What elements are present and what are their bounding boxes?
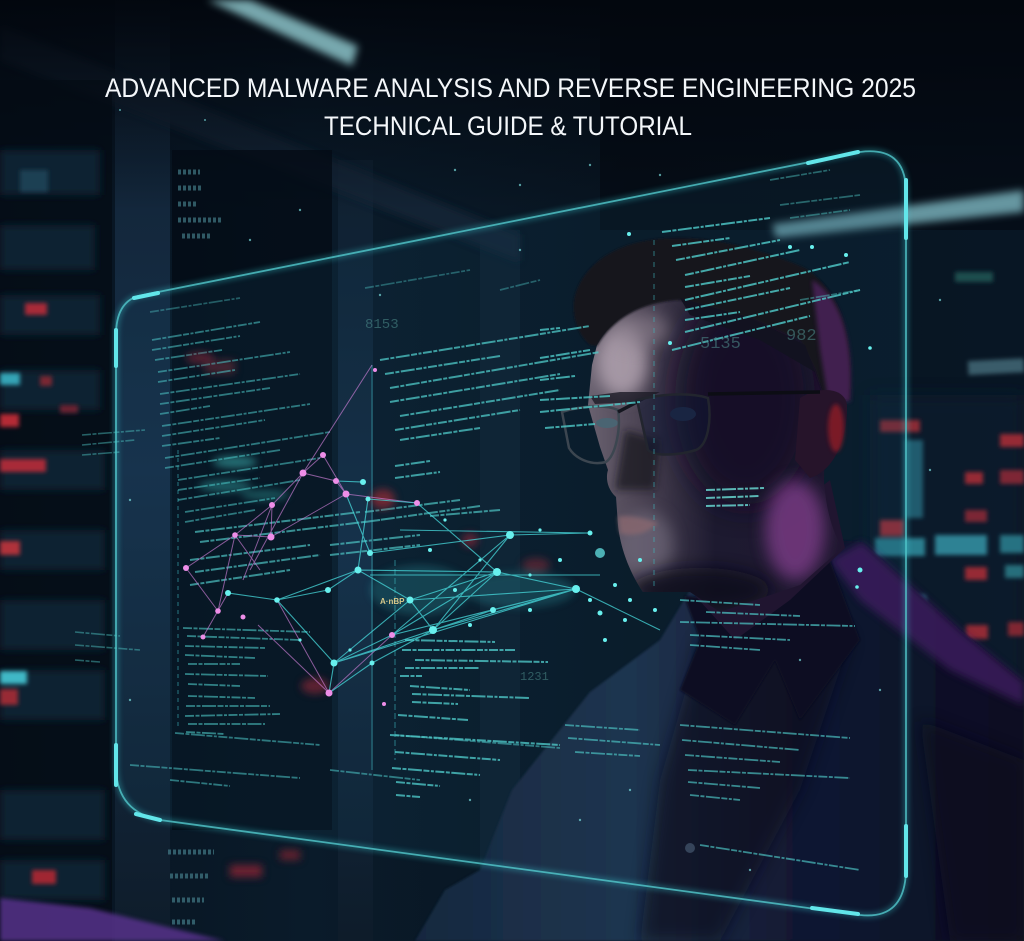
brow-side light xyxy=(610,312,670,348)
shirt collar xyxy=(680,560,860,725)
hair fill behind code xyxy=(680,298,815,372)
code block: upper left xyxy=(152,322,330,522)
title line 2: TECHNICAL GUIDE & TUTORIAL xyxy=(324,111,692,141)
vertical panel guides xyxy=(178,240,654,770)
face xyxy=(588,299,833,612)
network graph xyxy=(183,232,872,706)
ear xyxy=(795,390,847,478)
faded digits: 1231 xyxy=(520,670,549,684)
floor purple strip xyxy=(0,898,225,941)
server rack: right xyxy=(870,272,1024,795)
faded digits: 8153 xyxy=(365,317,399,333)
code block: mid over graph xyxy=(190,500,500,585)
graph edges: cyan xyxy=(228,481,660,693)
lips xyxy=(618,516,658,535)
code block: centre xyxy=(380,326,600,478)
faded digits: 982 xyxy=(786,327,817,346)
ear red glow xyxy=(828,404,844,452)
code block: lower centre xyxy=(390,640,560,797)
graph edges: pink xyxy=(186,365,417,693)
shirt button xyxy=(685,843,695,853)
hair xyxy=(574,238,851,402)
scattered particles xyxy=(119,109,941,871)
brow xyxy=(590,392,660,404)
glass panel tint xyxy=(116,151,906,915)
title line 1: ADVANCED MALWARE ANALYSIS AND REVERSE ENGINEERING 2025 xyxy=(105,73,916,103)
code block: top panel faint xyxy=(150,270,540,312)
graph amber label: A·nBP xyxy=(380,597,405,606)
cheek purple glow xyxy=(765,480,825,580)
shirt xyxy=(415,540,1024,941)
code block: left of glasses xyxy=(540,328,640,428)
nose shadow xyxy=(615,430,660,490)
glowing panel frame xyxy=(116,151,906,915)
code block: bottom caption xyxy=(130,733,560,786)
faded digits: 5135 xyxy=(700,335,741,354)
chin shadow xyxy=(630,568,770,612)
hair purple side xyxy=(812,280,851,402)
forehead highlight xyxy=(596,326,648,398)
code block: outside left xyxy=(75,430,145,662)
ceiling light streak xyxy=(207,0,358,66)
graph nodes: cyan xyxy=(225,232,872,666)
title xyxy=(105,73,916,141)
blurred data glows xyxy=(186,352,575,694)
shirt dark folds xyxy=(640,590,1024,941)
code block: lower left xyxy=(183,628,310,734)
code block: shirt lower xyxy=(565,725,860,870)
server rack: left xyxy=(0,150,105,900)
code text blocks on panel xyxy=(75,170,860,870)
code block: shirt top xyxy=(680,600,855,650)
code block: top right corner xyxy=(770,170,860,300)
eyes xyxy=(596,407,696,428)
server rack: centre-left with digits xyxy=(168,172,300,922)
person xyxy=(415,238,1024,941)
wall light streak xyxy=(772,190,1024,238)
shirt shoulder highlight xyxy=(830,542,1024,705)
code block: on cheek xyxy=(706,488,765,506)
lower face light xyxy=(617,511,673,579)
glasses xyxy=(562,392,820,463)
dark central face shadow xyxy=(675,295,815,505)
graph nodes: pink xyxy=(183,368,420,706)
code block: forehead top right xyxy=(662,218,860,350)
faded digits xyxy=(365,317,817,684)
neck xyxy=(690,480,845,640)
